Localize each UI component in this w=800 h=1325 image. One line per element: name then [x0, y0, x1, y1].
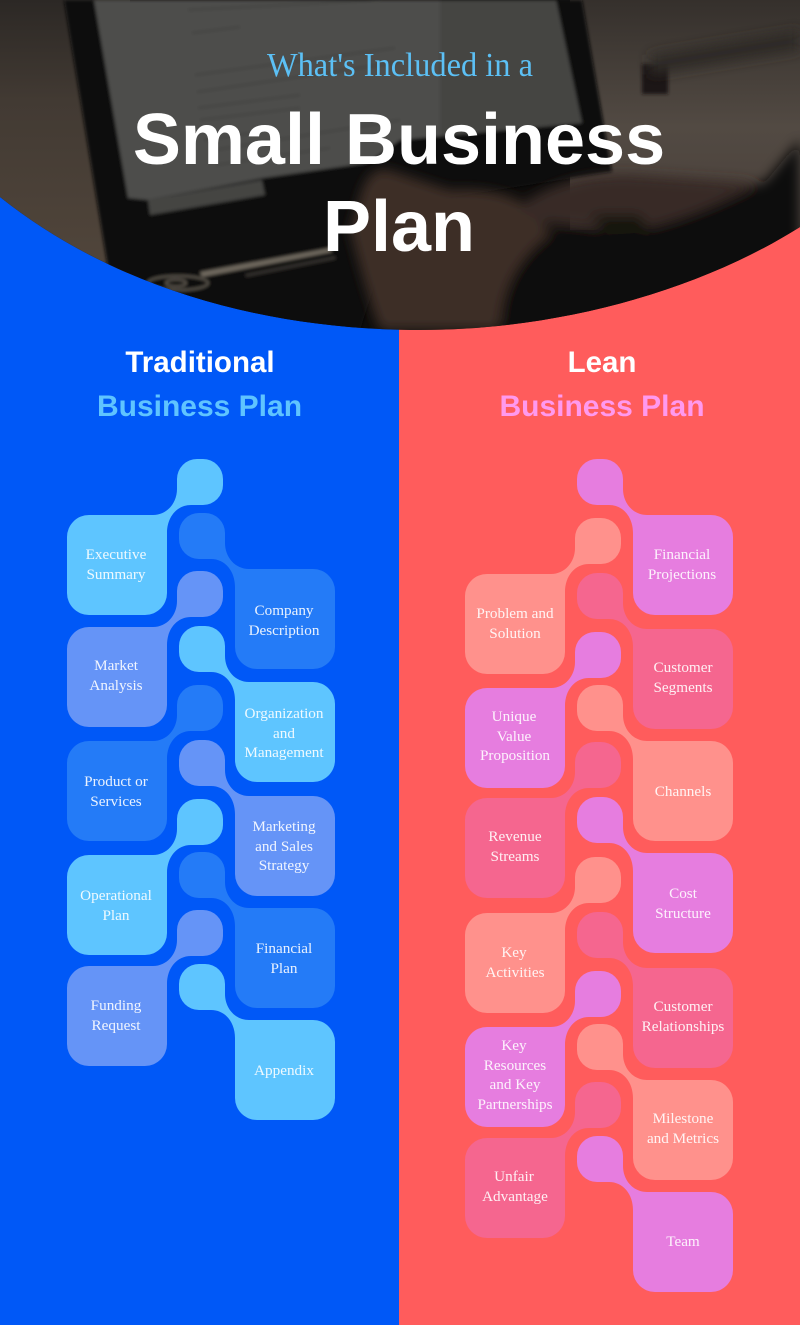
card: Milestone and Metrics: Milestone	[653, 1110, 714, 1127]
card: Milestone and Metrics	[577, 1024, 733, 1180]
card: Product or Services	[67, 685, 223, 841]
card: Unfair Advantage	[465, 1082, 621, 1238]
title	[133, 100, 665, 267]
card: Unfair Advantage: Advantage	[482, 1188, 548, 1205]
heading: traditional business plan: Business Plan	[97, 390, 302, 423]
card: Company Description	[179, 513, 335, 669]
card: Marketing and Sales Strategy: and Sales	[255, 838, 313, 855]
panel: lean plan flow	[465, 459, 733, 1292]
card: Unique Value Proposition: Unique	[492, 708, 537, 725]
card: Financial Plan	[179, 852, 335, 1008]
card: Customer Segments: Customer	[653, 659, 713, 676]
card: Operational Plan: Plan	[102, 907, 130, 924]
title: Small Business	[133, 100, 665, 180]
card: Market Analysis: Analysis	[89, 677, 143, 694]
card: Organization and Management: Management	[244, 744, 324, 761]
card: Funding Request: Request	[92, 1017, 141, 1034]
card: Customer Segments: Segments	[653, 679, 713, 696]
card: Product or Services: Product or	[84, 773, 148, 790]
card: Key Activities	[465, 857, 621, 1013]
card: Organization and Management	[179, 626, 335, 782]
card: Funding Request	[67, 910, 223, 1066]
heading: traditional business plan: Traditional	[125, 346, 275, 379]
title: Plan	[323, 187, 475, 267]
card: Financial Projections: Projections	[648, 566, 716, 583]
card: Channels	[577, 685, 733, 841]
card: Appendix: Appendix	[254, 1062, 314, 1079]
card: Milestone and Metrics: and Metrics	[647, 1130, 719, 1147]
card: Key Activities: Activities	[485, 964, 545, 981]
card: Product or Services: Services	[90, 793, 142, 810]
card: Customer Relationships	[577, 912, 733, 1068]
card: Team	[577, 1136, 733, 1292]
card: Revenue Streams	[465, 742, 621, 898]
heading: lean business plan	[499, 346, 705, 423]
card: Executive Summary: Executive	[86, 546, 147, 563]
card: Unique Value Proposition: Proposition	[480, 747, 550, 764]
card: Key Resources and Key Partnerships: Partnerships	[477, 1096, 553, 1113]
card: Market Analysis	[67, 571, 223, 727]
card: Key Resources and Key Partnerships	[465, 971, 621, 1127]
background: right coral panel	[399, 0, 800, 1325]
card: Revenue Streams: Streams	[491, 848, 540, 865]
card: Unique Value Proposition	[465, 632, 621, 788]
card: Unfair Advantage: Unfair	[494, 1168, 534, 1185]
card: Financial Plan: Plan	[270, 960, 298, 977]
heading: lean business plan: Business Plan	[499, 390, 705, 423]
card: Appendix	[179, 964, 335, 1120]
card: Team: Team	[666, 1233, 700, 1250]
background: left blue panel	[0, 0, 399, 1325]
card: Marketing and Sales Strategy	[179, 740, 335, 896]
card: Unique Value Proposition: Value	[497, 728, 532, 745]
card: Customer Relationships: Customer	[653, 998, 713, 1015]
card: Organization and Management: and	[273, 725, 295, 742]
card: Financial Plan: Financial	[256, 940, 312, 957]
card: Customer Segments	[577, 573, 733, 729]
card: Company Description: Description	[249, 622, 320, 639]
card: Organization and Management: Organization	[244, 705, 324, 722]
card: Financial Projections	[577, 459, 733, 615]
card: Key Activities: Key	[501, 944, 527, 961]
subtitle: What's Included in a	[267, 47, 533, 84]
card: Key Resources and Key Partnerships: and Key	[489, 1076, 541, 1093]
heading: traditional business plan	[97, 346, 302, 423]
card: Executive Summary: Summary	[86, 566, 146, 583]
card: Revenue Streams: Revenue	[488, 828, 542, 845]
card: Marketing and Sales Strategy: Strategy	[259, 857, 310, 874]
card: Key Resources and Key Partnerships: Key	[501, 1037, 527, 1054]
card: Executive Summary	[67, 459, 223, 615]
card: Problem and Solution: Solution	[489, 625, 541, 642]
card: Cost Structure	[577, 797, 733, 953]
header photo: laptop and hands	[0, 0, 800, 335]
card: Funding Request: Funding	[91, 997, 142, 1014]
card: Problem and Solution: Problem and	[476, 605, 554, 622]
heading: lean business plan: Lean	[568, 346, 636, 379]
card: Company Description: Company	[254, 602, 314, 619]
card: Financial Projections: Financial	[654, 546, 710, 563]
card: Channels: Channels	[655, 783, 711, 800]
card: Marketing and Sales Strategy: Marketing	[252, 818, 316, 835]
card: Market Analysis: Market	[94, 657, 139, 674]
card: Key Resources and Key Partnerships: Resources	[484, 1057, 546, 1074]
card: Operational Plan: Operational	[80, 887, 152, 904]
card: Problem and Solution	[465, 518, 621, 674]
card: Operational Plan	[67, 799, 223, 955]
card: Customer Relationships: Relationships	[642, 1018, 724, 1035]
card: Cost Structure: Structure	[655, 905, 711, 922]
card: Cost Structure: Cost	[669, 885, 698, 902]
panel: traditional plan flow	[67, 459, 335, 1120]
